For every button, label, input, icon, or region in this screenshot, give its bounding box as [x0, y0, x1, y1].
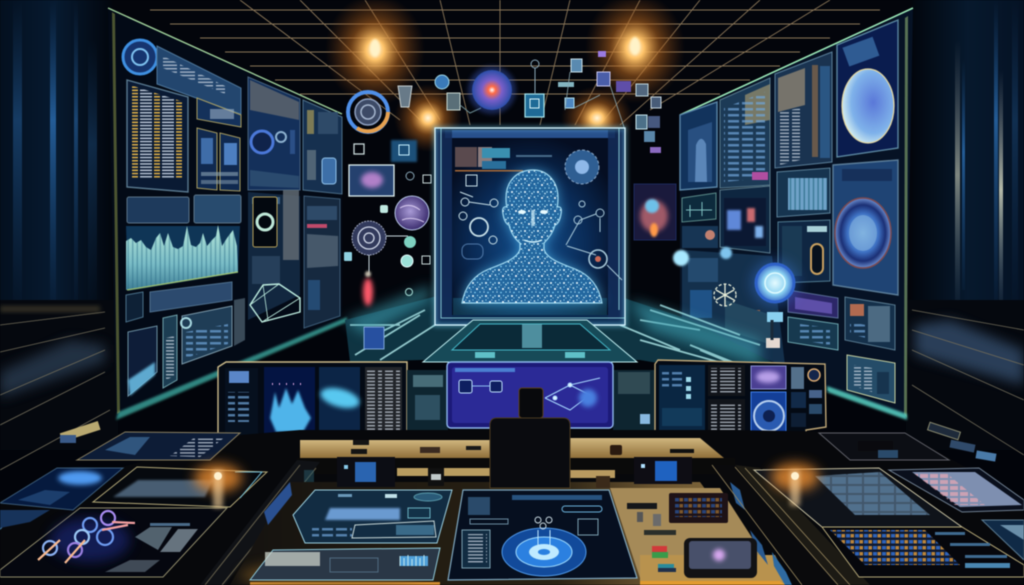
icon: cup	[398, 86, 412, 107]
network glow	[38, 511, 135, 563]
panel: right monitor	[655, 360, 826, 445]
monitor stand left	[292, 441, 295, 465]
screen: purple media	[788, 290, 838, 318]
screen: small network	[682, 193, 718, 248]
desk side strip with blue screens	[264, 465, 870, 585]
icon: wire sphere	[714, 284, 736, 306]
hologram pedestal	[423, 320, 637, 362]
floating icons left of the frame	[344, 51, 661, 349]
screen: code	[788, 317, 838, 350]
centre desk surface	[230, 482, 790, 585]
widget: base lights	[766, 312, 783, 348]
text table	[127, 80, 188, 192]
icon: node box	[391, 140, 417, 162]
floating cyan floor with streak lines	[345, 285, 830, 392]
panel: centre console G with radar	[448, 490, 637, 580]
desk base	[0, 430, 1024, 585]
column 3	[303, 100, 342, 194]
panel: console left bottom A	[77, 432, 240, 460]
tablet	[684, 538, 757, 578]
chair	[490, 388, 570, 488]
screen: stat blocks	[845, 297, 895, 350]
screen: figure	[680, 102, 717, 190]
text sidebar	[225, 368, 258, 439]
panel: right console J keys	[822, 527, 1024, 577]
colour swatches	[652, 546, 676, 572]
person silhouette	[455, 165, 610, 310]
chart tile	[264, 367, 315, 438]
lower-left widgets	[126, 282, 245, 396]
network lines	[545, 378, 600, 410]
screen: arch widget	[778, 220, 830, 283]
radar dial	[502, 517, 586, 576]
panel: central hologram frame	[435, 128, 625, 325]
desk gadgets left	[60, 421, 101, 443]
icon: circular dial	[123, 40, 157, 74]
lamps and glows	[325, 0, 685, 152]
icon: red core orb	[468, 66, 516, 114]
small nodes top row	[435, 75, 481, 113]
icon: spiral badge	[352, 221, 408, 275]
desk small items	[351, 440, 694, 488]
panel: centre console F	[250, 548, 440, 580]
panel: right console back	[819, 433, 949, 460]
text column	[708, 365, 745, 435]
screen: radial gauge	[833, 160, 898, 295]
network left	[459, 175, 498, 259]
panel: console oval B	[0, 468, 123, 510]
icon: tile	[525, 60, 544, 117]
orange desk glows	[194, 463, 819, 508]
monitor stand right	[743, 444, 748, 460]
icon: glowing orb	[751, 259, 799, 307]
panel: left wall of screens	[108, 8, 347, 420]
icon: nodes	[344, 172, 431, 296]
desk devices	[337, 440, 694, 488]
panel: centre console E	[293, 490, 452, 543]
galaxy tile	[318, 367, 362, 438]
tiles	[455, 368, 515, 393]
screen: bars	[777, 168, 830, 217]
screen: data columns	[720, 78, 770, 188]
purple tile	[751, 366, 786, 389]
round image tile	[751, 392, 786, 440]
panel: right console I pink keyboard	[889, 468, 1024, 512]
floor left	[0, 300, 118, 470]
small switches	[627, 503, 676, 535]
small tile stack	[791, 367, 822, 427]
column 2 lower	[248, 190, 300, 322]
icon: spiral dial	[348, 92, 388, 132]
panel: right wall of screens	[673, 8, 913, 420]
screen: media window	[720, 186, 770, 253]
screen: planet	[837, 20, 898, 157]
icon: small square	[354, 144, 364, 154]
panel: console D neural network	[0, 508, 227, 577]
small widgets upper	[197, 98, 241, 191]
chart panel	[126, 195, 241, 291]
header tiles	[455, 147, 552, 172]
keyboard controls on tan surface	[627, 493, 757, 578]
between monitors dashboard	[407, 370, 655, 432]
panel: console C	[93, 467, 267, 507]
icon: flame poster	[634, 184, 676, 240]
screen group lower columns	[682, 250, 785, 365]
icon cluster top right	[558, 51, 661, 153]
ceiling grid	[150, 0, 880, 125]
device left	[337, 457, 395, 487]
keypad	[669, 493, 728, 523]
device right	[634, 457, 692, 484]
panel: right console H	[754, 468, 962, 527]
screen: tall list	[775, 52, 832, 168]
floor right	[906, 300, 1024, 455]
network right	[565, 150, 622, 280]
header strip	[157, 46, 241, 114]
data blocks	[105, 523, 198, 572]
red beam	[363, 271, 373, 306]
desk gadgets right	[928, 422, 997, 462]
panel: left monitor	[218, 362, 407, 444]
image tile	[349, 165, 394, 196]
icon: planet	[395, 196, 429, 230]
column 2	[248, 77, 300, 190]
screen: bottom list	[847, 355, 895, 403]
icon: small glow node	[673, 247, 732, 266]
paragraph tile	[365, 367, 402, 437]
panel: right edge console	[982, 520, 1024, 560]
column 3 lower	[304, 196, 340, 328]
panel: centre monitor	[447, 362, 613, 428]
icon: chip	[364, 327, 384, 349]
side wall streaks	[13, 0, 1018, 310]
bar chart	[126, 225, 238, 290]
data sidebar	[659, 365, 705, 431]
